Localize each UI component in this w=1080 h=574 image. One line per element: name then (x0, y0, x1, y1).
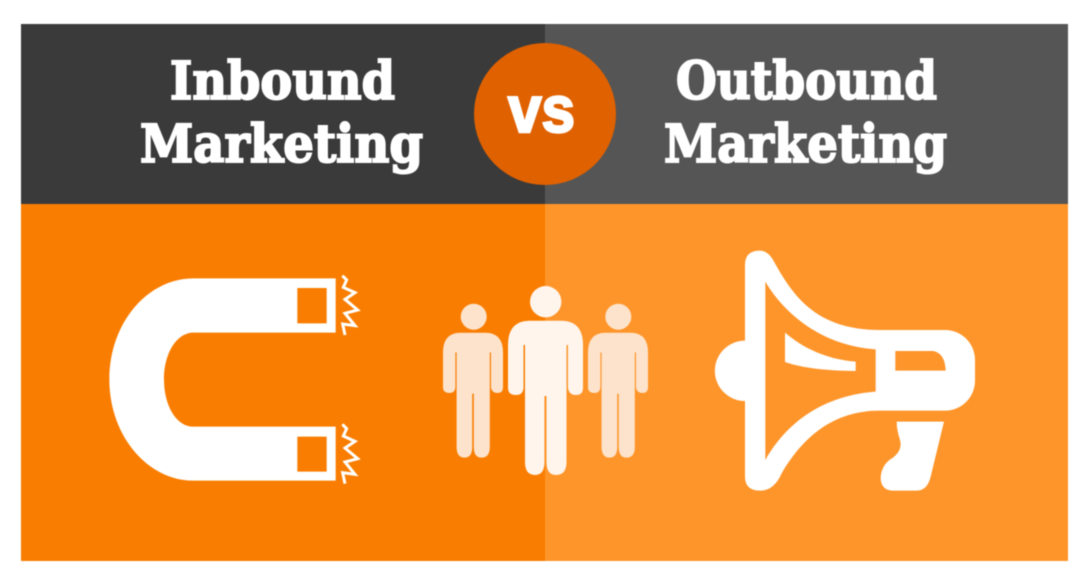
panel: inbound header (21, 24, 545, 204)
heading: Outbound Marketing: Outbound (676, 51, 937, 112)
person: left (443, 304, 503, 458)
panel: outbound body (545, 204, 1068, 561)
icon: magnet (109, 276, 358, 484)
icon: magnet upper sparks (342, 276, 358, 335)
person: centre (508, 286, 583, 475)
icon: magnet lower sparks (342, 424, 358, 484)
heading: Outbound Marketing (664, 51, 947, 175)
panel: outbound header (545, 24, 1068, 204)
heading: Inbound Marketing: Marketing (140, 114, 423, 175)
megaphone handle (881, 422, 944, 491)
icon: megaphone (715, 251, 975, 491)
person: right (588, 304, 648, 458)
heading: Inbound Marketing (140, 51, 423, 175)
vs badge: vs (508, 72, 575, 146)
megaphone inner highlight (785, 333, 856, 371)
vs badge (474, 43, 616, 185)
icon: people group (443, 286, 648, 475)
heading: Outbound Marketing: Marketing (664, 114, 947, 175)
panel: inbound body (21, 204, 545, 561)
heading: Inbound Marketing: Inbound (170, 51, 395, 112)
